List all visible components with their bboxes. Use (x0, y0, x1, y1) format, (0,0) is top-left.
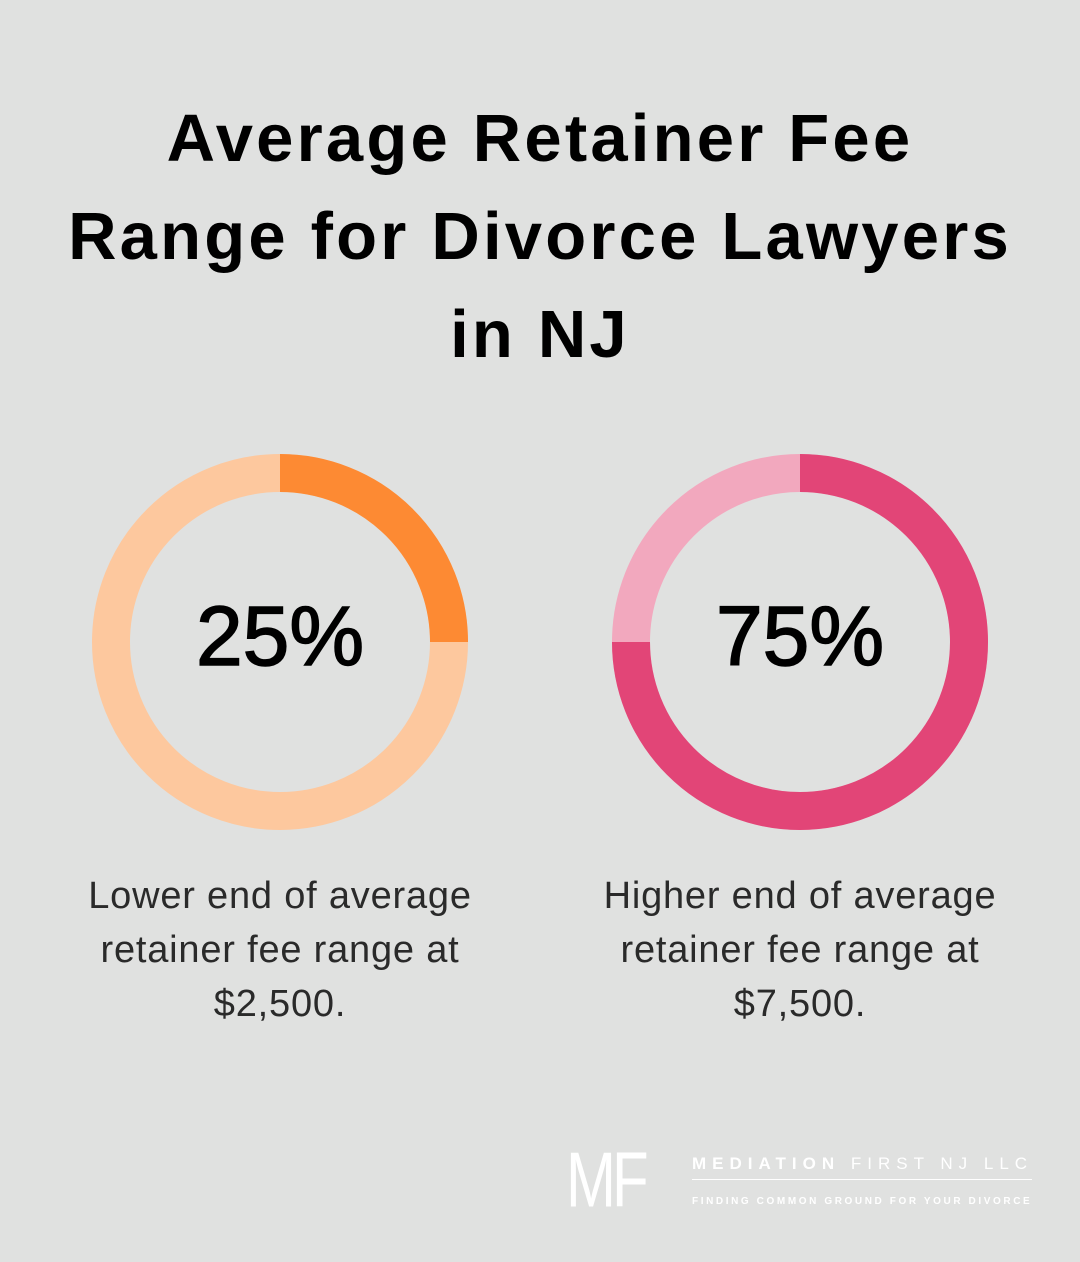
title (68, 101, 1012, 372)
logo: MF (566, 1136, 645, 1223)
title: Average Retainer Fee (167, 101, 913, 176)
logo: FINDING COMMON GROUND FOR YOUR DIVORCE (692, 1196, 1032, 1207)
caption left: Lower end of average retainer fee range at $2,500. (88, 875, 472, 1025)
logo (566, 1136, 1033, 1223)
title: in NJ (450, 297, 630, 372)
caption right: Higher end of average retainer fee range at $7,500. (604, 875, 996, 1025)
value: 75%: 75% (716, 589, 884, 683)
logo: MEDIATION FIRST NJ LLC (692, 1154, 1033, 1173)
title: Range for Divorce Lawyers (68, 199, 1012, 274)
value: 25%: 25% (196, 589, 364, 683)
